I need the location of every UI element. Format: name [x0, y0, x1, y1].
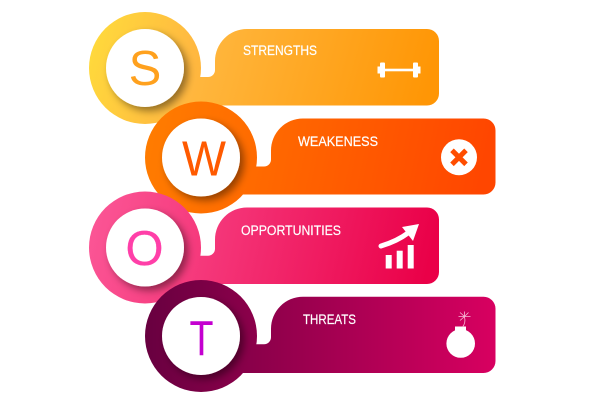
letter disc: W	[162, 118, 240, 196]
panel: strengths	[89, 12, 439, 124]
ring: threats	[145, 280, 257, 392]
panel: threats	[145, 280, 496, 392]
letter O: O	[126, 222, 164, 276]
banner shape: threats	[201, 297, 496, 373]
heading: threats: THREATS	[303, 312, 356, 327]
ring: opportunities	[89, 192, 201, 304]
ring: strengths	[89, 12, 201, 124]
panel: weakness	[145, 102, 496, 214]
letter disc: O	[106, 208, 184, 286]
banner shape: weakness	[201, 118, 496, 194]
letter W: W	[182, 132, 227, 186]
icon: growth chart	[381, 224, 419, 268]
icon: bomb	[446, 312, 475, 358]
panel: opportunities	[89, 192, 439, 304]
ring: weakness	[145, 102, 257, 214]
icon: dumbbell	[378, 62, 420, 78]
heading: weakness: WEAKENESS	[298, 134, 378, 149]
banner shape: opportunities	[145, 208, 439, 284]
banner shape: strengths	[145, 29, 439, 106]
letter disc: S	[106, 29, 184, 107]
heading: strengths: STRENGTHS	[243, 43, 317, 58]
icon: cross in circle	[441, 139, 477, 175]
letter disc: T	[162, 297, 240, 375]
letter T: T	[190, 312, 214, 366]
letter S: S	[129, 42, 161, 96]
heading: opportunities: OPPORTUNITIES	[241, 223, 341, 238]
